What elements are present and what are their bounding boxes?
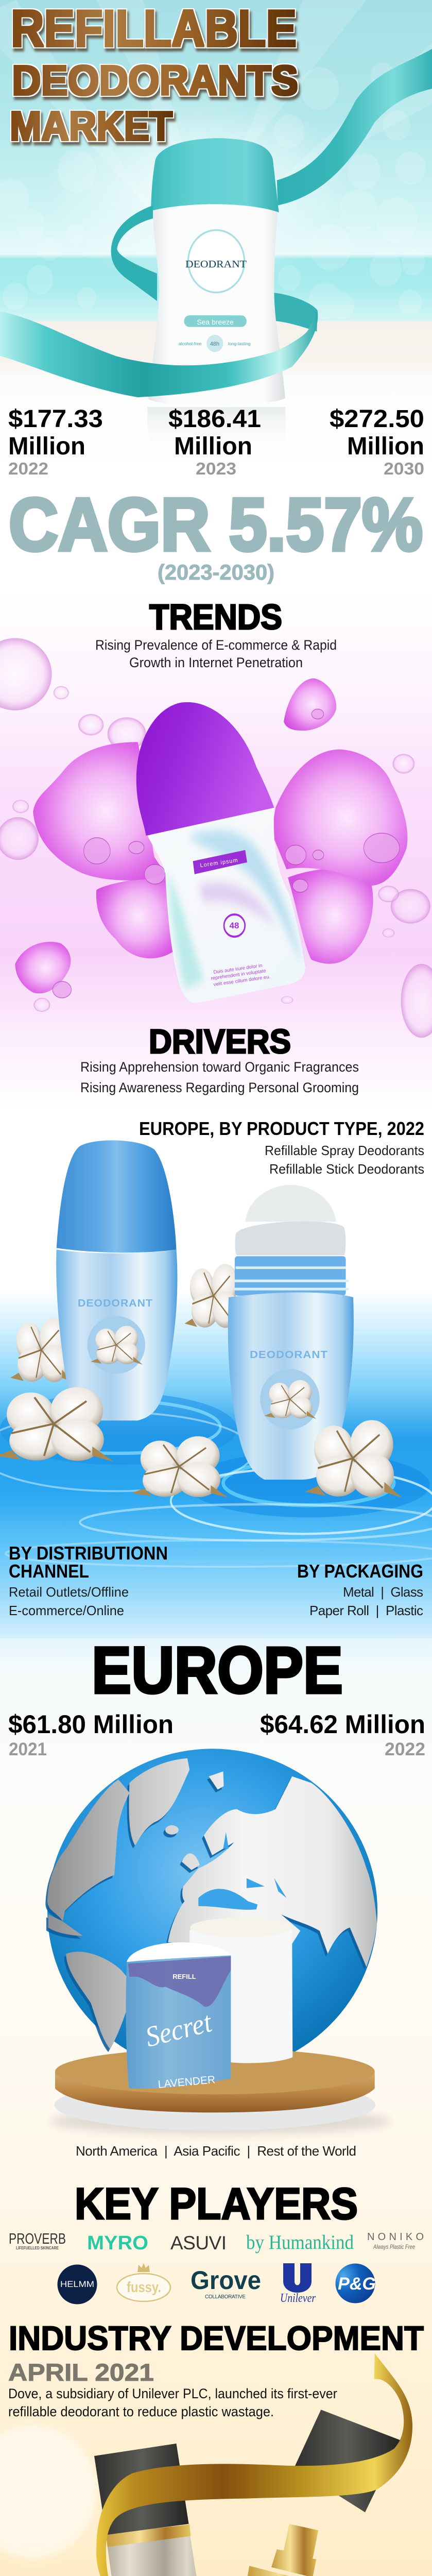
heading: by distribution channel: CHANNEL xyxy=(9,1561,89,1582)
bottle small print xyxy=(211,963,271,988)
cotton inside emblems xyxy=(91,1326,316,1419)
panel: product type with blue bottles and water xyxy=(0,1108,432,1641)
petal: small top right xyxy=(284,679,336,731)
bottle small print: velit esse cillum dolore eu. xyxy=(213,974,271,988)
right can nozzle xyxy=(271,2524,318,2576)
bottle text xyxy=(78,1298,328,1361)
text: development xyxy=(8,2386,337,2419)
logo: Proverb xyxy=(9,2231,66,2250)
platform base xyxy=(54,2079,375,2130)
text: trends list: Rising Prevalence of E-commerce & Rapid xyxy=(95,637,337,653)
title xyxy=(10,0,298,149)
stat: europe 2021: 2021 xyxy=(9,1739,47,1759)
heading: key players: KEY PLAYERS xyxy=(75,2179,358,2229)
logo: Unilever: Unilever xyxy=(280,2292,316,2305)
platform shadow xyxy=(49,2108,391,2134)
panel: europe region xyxy=(0,1638,432,2179)
text: product types: Refillable Stick Deodorants xyxy=(269,1161,424,1177)
logo: Unilever xyxy=(280,2263,316,2305)
48 ring xyxy=(224,914,245,937)
logo: Noniko xyxy=(367,2231,424,2250)
text: drivers list: Rising Apprehension toward Organic Fragrances xyxy=(80,1059,359,1075)
stat: europe 2021 xyxy=(8,1710,174,1759)
logo: Proverb: PROVERB xyxy=(9,2231,66,2247)
text: packaging types: Metal | Glass xyxy=(343,1584,423,1600)
reflection of bottle xyxy=(147,407,285,459)
logo: Myro: MYRO xyxy=(87,2232,148,2254)
right bottle dome xyxy=(245,1185,336,1222)
bottle watercolour: lilac arc xyxy=(198,883,275,927)
logo: P&G: P&G xyxy=(338,2274,376,2294)
left can cap xyxy=(94,2444,189,2535)
logo: Grove: COLLABORATIVE xyxy=(205,2294,246,2300)
bottle label ring xyxy=(188,230,245,293)
ribbon: right back loop xyxy=(274,293,317,332)
right can collar xyxy=(247,2566,328,2576)
title: DEODORANTS xyxy=(12,57,298,104)
refill box top xyxy=(127,1942,231,1962)
logo: Noniko: NONIKO xyxy=(367,2231,424,2243)
drops on petals xyxy=(53,709,400,998)
title: REFILLABLE xyxy=(11,0,297,58)
text: product types xyxy=(265,1143,424,1177)
subheading: date: APRIL 2021 xyxy=(8,2359,154,2386)
text: product types: Refillable Spray Deodorants xyxy=(265,1143,424,1158)
Refill label: REFILL xyxy=(172,1973,196,1980)
stat: 2023 market size: $186.41 xyxy=(168,405,261,433)
left can gold band xyxy=(106,2524,191,2547)
right bottle collar xyxy=(235,1222,346,1255)
stat: 2030 market size: $272.50 xyxy=(330,405,424,433)
logo: by Humankind: by Humankind xyxy=(246,2231,354,2253)
stat: 2030 market size: Million xyxy=(347,433,424,460)
Secret logo: Secret xyxy=(142,2006,216,2054)
text: distribution channels xyxy=(9,1584,129,1618)
stat: 2022 market size: $177.33 xyxy=(8,405,103,433)
text: drivers list: Rising Awareness Regarding Personal Grooming xyxy=(80,1080,359,1095)
bottle watercolour: teal swash xyxy=(168,873,204,989)
left bottle cap xyxy=(57,1140,176,1252)
white stick xyxy=(189,1921,292,2063)
48 text: 48 xyxy=(230,921,239,930)
platform wood side xyxy=(55,2072,375,2112)
right bottle neck highlights xyxy=(234,1268,349,1289)
stat: europe 2022: $64.62 Million xyxy=(260,1710,425,1739)
bubble: top left xyxy=(0,638,52,710)
right bottle body xyxy=(228,1292,354,1480)
logo: Helmm xyxy=(58,2265,97,2304)
land masses xyxy=(47,1758,377,2049)
title: MARKET xyxy=(10,103,172,149)
text: packaging types: Paper Roll | Plastic xyxy=(309,1603,423,1618)
bottle text: DEODORANT xyxy=(250,1349,328,1361)
bottle text: DEODORANT xyxy=(78,1298,153,1309)
ribbon: back sweep xyxy=(277,49,432,206)
bokeh xyxy=(0,2426,398,2576)
stat: 2022 market size xyxy=(8,405,103,478)
logo: Asuvi: ASUVI xyxy=(170,2232,227,2253)
deodorant body xyxy=(148,205,285,405)
lavender flowers xyxy=(128,1956,231,2007)
platform wood top xyxy=(55,2048,375,2094)
stat: 2030 market size: 2030 xyxy=(384,459,424,478)
stat: europe 2021: $61.80 Million xyxy=(8,1710,174,1739)
logo: Proverb: LIFEFUELLED SKINCARE xyxy=(16,2245,59,2250)
logo: P&G xyxy=(336,2264,376,2303)
left bottle body xyxy=(56,1250,177,1420)
text: development: refillable deodorant to reduce plastic wastage. xyxy=(8,2404,274,2419)
stat: europe 2022 xyxy=(260,1710,425,1759)
logo: Helmm: HELMM xyxy=(60,2279,94,2289)
gold ribbon: top sweep xyxy=(96,2353,412,2576)
text: trends list: Growth in Internet Penetration xyxy=(129,655,303,670)
Lavender label: LAVENDER xyxy=(158,2074,216,2091)
stat: 2030 market size xyxy=(330,405,424,478)
roll-on bottle body xyxy=(147,808,305,1003)
stat: 2023 market size: 2023 xyxy=(196,459,236,478)
heading: europe: EUROPE xyxy=(92,1634,343,1707)
inland seas xyxy=(198,1832,287,1910)
cotton behind left bottle xyxy=(10,1318,73,1383)
heading: by distribution channel xyxy=(9,1543,168,1582)
text: packaging types xyxy=(309,1584,423,1618)
bottle small print: Duis aute irure dolor in xyxy=(213,963,263,975)
right bottle neck xyxy=(235,1256,346,1296)
stat: 2023 market size xyxy=(168,405,261,478)
bottle label: 48h: 48h xyxy=(210,341,219,347)
purple tag xyxy=(193,850,247,874)
refill box xyxy=(126,1942,231,2089)
tag text: Lorem ipsum xyxy=(200,857,238,869)
logo: Noniko: Always Plastic Free xyxy=(373,2243,415,2250)
cotton: foreground group xyxy=(0,1387,402,1498)
globe xyxy=(47,1749,377,2073)
stat: 2022 market size: Million xyxy=(8,433,85,460)
text: development: Dove, a subsidiary of Unilever PLC, launched its first-ever xyxy=(8,2386,337,2401)
petal: upper left xyxy=(33,742,165,880)
petal: small bottom left xyxy=(15,942,71,993)
panel: players and industry background xyxy=(0,2177,432,2576)
bottle label: claims: alcohol-free xyxy=(179,341,202,346)
bottle label: DEODRANT: DEODRANT xyxy=(185,259,247,270)
panel: hero background with deodorant stick xyxy=(0,0,432,479)
panel: trends and drivers xyxy=(0,592,432,1108)
illustration: gold spray deodorants xyxy=(0,2353,412,2576)
text: distribution channels: Retail Outlets/Offline xyxy=(9,1584,129,1600)
heading: trends: TRENDS xyxy=(149,597,282,637)
stat: 2023 market size: Million xyxy=(174,433,252,460)
stat: europe 2022: 2022 xyxy=(385,1739,425,1759)
left bottle emblem xyxy=(88,1316,145,1374)
petal: upper right xyxy=(271,750,407,886)
bubbles: droplets xyxy=(0,686,432,1038)
text: other regions: North America | Asia Pacific | Rest of the World xyxy=(76,2143,356,2159)
48h badge xyxy=(206,335,223,352)
heading: drivers: DRIVERS xyxy=(149,1022,291,1060)
text: drivers list xyxy=(80,1059,359,1095)
water ripples xyxy=(0,1393,432,1567)
stick top xyxy=(190,1918,292,1937)
stat: 2022 market size: 2022 xyxy=(8,459,48,478)
ribbon: main front sweep xyxy=(0,310,318,397)
cotton behind right bottle xyxy=(185,1264,244,1329)
bottle watercolour: blue swash xyxy=(187,830,302,964)
bottle label: long-lasting: long-lasting xyxy=(228,341,251,346)
roll-on bottle cap xyxy=(136,702,274,836)
logo: Fussy: fussy. xyxy=(127,2279,161,2296)
sea breeze pill xyxy=(184,315,247,327)
logo: Fussy xyxy=(117,2263,170,2301)
black cap: loose xyxy=(294,2410,400,2512)
text: trends list xyxy=(95,637,337,670)
text: distribution channels: E-commerce/Online xyxy=(9,1603,124,1618)
petal: lower right xyxy=(288,868,373,964)
CAGR period: (2023-2030) xyxy=(158,560,274,584)
deodorant cap xyxy=(151,138,279,212)
ribbon: upper left loop xyxy=(111,206,157,301)
bottle small print: reprehenderit in voluptate xyxy=(211,968,266,981)
bottle label: sea breeze: Sea breeze xyxy=(197,318,234,326)
right bottle emblem xyxy=(260,1369,320,1429)
logo: Grove: Grove xyxy=(191,2266,261,2295)
left can body xyxy=(108,2535,220,2576)
heading: by distribution channel: BY DISTRIBUTIONN xyxy=(9,1543,168,1564)
petal: lower left xyxy=(96,873,174,958)
